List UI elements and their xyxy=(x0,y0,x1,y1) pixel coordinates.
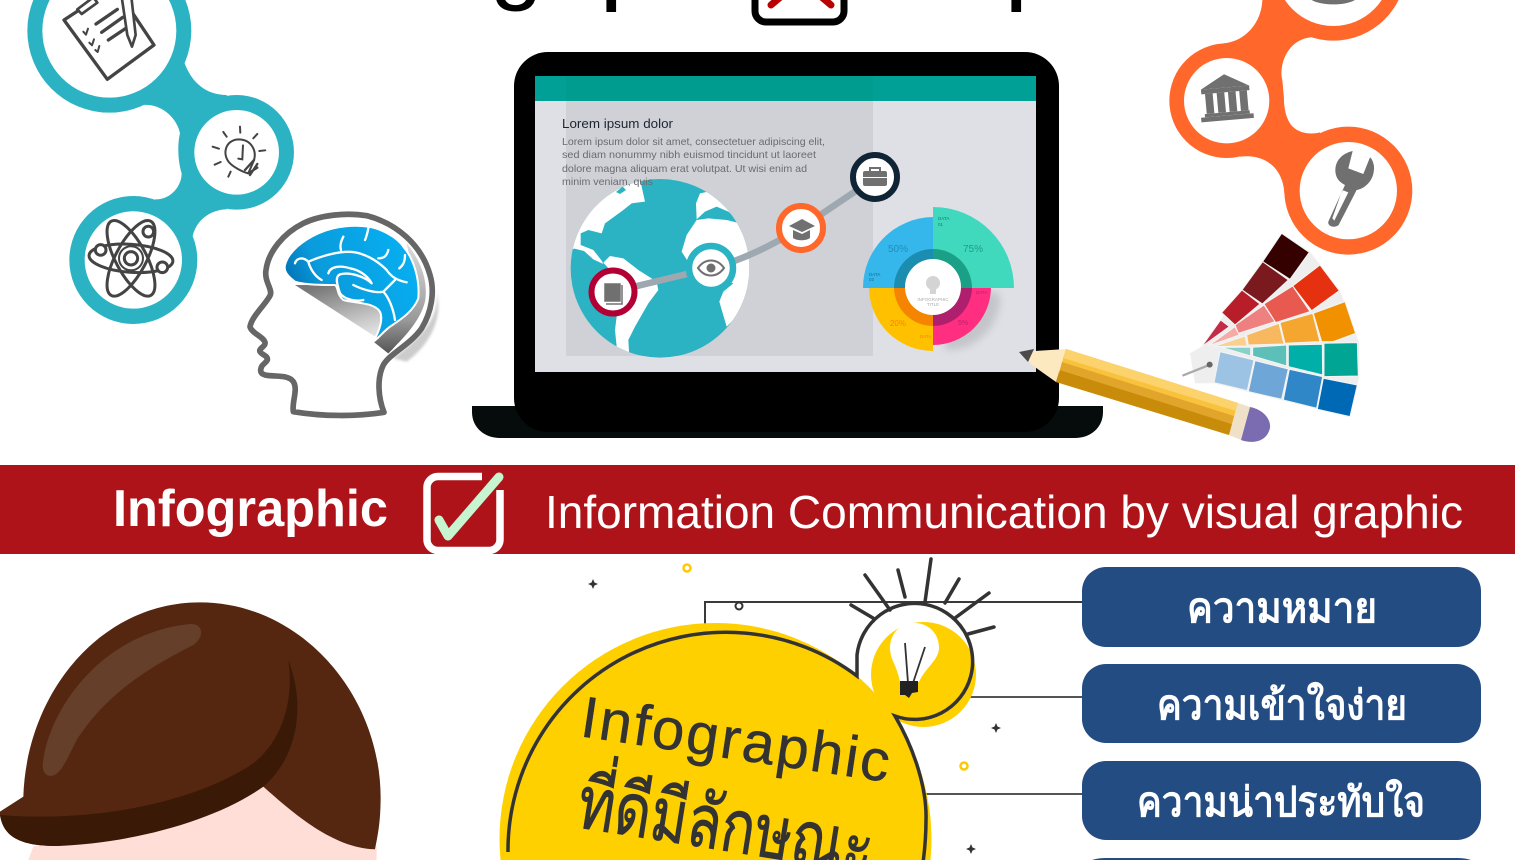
outer soft shadow xyxy=(393,292,438,362)
icon: briefcase node xyxy=(853,155,897,199)
chart: infographic pie: INFOGRAPHIC xyxy=(917,297,949,302)
chart: infographic pie: 5% xyxy=(958,320,968,327)
heading on circle: Infographic xyxy=(577,685,894,795)
panel: meaning pill xyxy=(1082,567,1481,647)
chart: infographic pie: DATA xyxy=(920,334,931,339)
title fragment (cropped heading) xyxy=(490,0,1065,22)
decorative dots and stars xyxy=(588,564,1001,854)
banner heading: Infographic xyxy=(113,480,388,538)
chart: infographic pie: 20% xyxy=(890,319,906,328)
icon: graduation cap node xyxy=(779,206,823,250)
chart: infographic pie: DATA xyxy=(976,290,987,295)
screen paragraph: sed diam nonummy nibh euismod tincidunt ut laoreet xyxy=(562,149,816,161)
chart: infographic pie: 50% xyxy=(888,244,908,255)
screen paragraph: dolore magna aliquam erat volutpat. Ut wisi enim ad xyxy=(562,163,807,175)
panel: impressive pill xyxy=(1082,761,1481,840)
panel: cropped fourth pill xyxy=(1092,858,1471,860)
panel: easy to understand pill xyxy=(1082,664,1481,743)
icon: human head with brain xyxy=(250,214,438,415)
laptop screen xyxy=(535,76,1036,372)
screen paragraph: Lorem ipsum dolor sit amet, consectetuer adipiscing elit, xyxy=(562,136,825,148)
chart: infographic pie: TITLE xyxy=(927,302,939,307)
pie shadow xyxy=(945,290,1000,350)
laptop xyxy=(472,52,1103,438)
panel: easy to understand pill: ความเข้าใจง่าย xyxy=(1157,681,1407,728)
yellow speech circle xyxy=(500,559,994,860)
laptop body xyxy=(514,52,1059,432)
icon: colour swatch fan xyxy=(1183,233,1359,417)
icon: checkbox xyxy=(427,476,500,550)
brain xyxy=(285,226,419,342)
panel: teal connected circles xyxy=(27,0,294,324)
chart: infographic pie: 01 xyxy=(938,222,944,227)
icon: eye node xyxy=(689,246,733,290)
icon: rays xyxy=(851,559,994,634)
chart: infographic pie xyxy=(863,207,1014,351)
progress path xyxy=(612,178,875,292)
screen paragraph: minim veniam, quis xyxy=(562,176,653,188)
icon: clipboard xyxy=(64,0,154,79)
brain shadow xyxy=(295,285,393,353)
icon: pencil xyxy=(1019,349,1270,442)
icon: top gray partial xyxy=(1312,0,1355,4)
chart: infographic pie: DATA xyxy=(869,272,880,277)
icon: bank building xyxy=(1197,72,1254,122)
globe xyxy=(563,177,757,358)
icon: light bulb xyxy=(890,623,939,698)
icon: idea bulb with clock xyxy=(213,127,265,177)
icon: book node xyxy=(592,270,634,314)
panel: meaning pill: ความหมาย xyxy=(1187,585,1377,631)
chart: infographic pie: 02 xyxy=(869,277,875,282)
banner xyxy=(0,465,1515,554)
screen heading: Lorem ipsum dolor xyxy=(562,116,674,131)
character hair and skin xyxy=(0,602,381,860)
panel: orange connected circles xyxy=(1169,0,1412,255)
icon: title checkbox xyxy=(755,0,844,22)
chart: infographic pie: DATA xyxy=(938,216,949,221)
panel: impressive pill: ความน่าประทับใจ xyxy=(1137,778,1425,825)
screen paragraph xyxy=(562,136,825,188)
icon: wrench xyxy=(1328,151,1374,227)
connector lines xyxy=(705,602,1082,794)
banner subtitle: Information Communication by visual graphic xyxy=(545,486,1463,538)
outline xyxy=(508,603,973,860)
laptop base xyxy=(472,406,1103,438)
chart: infographic pie: 75% xyxy=(963,244,983,255)
icon: atom xyxy=(88,214,174,303)
